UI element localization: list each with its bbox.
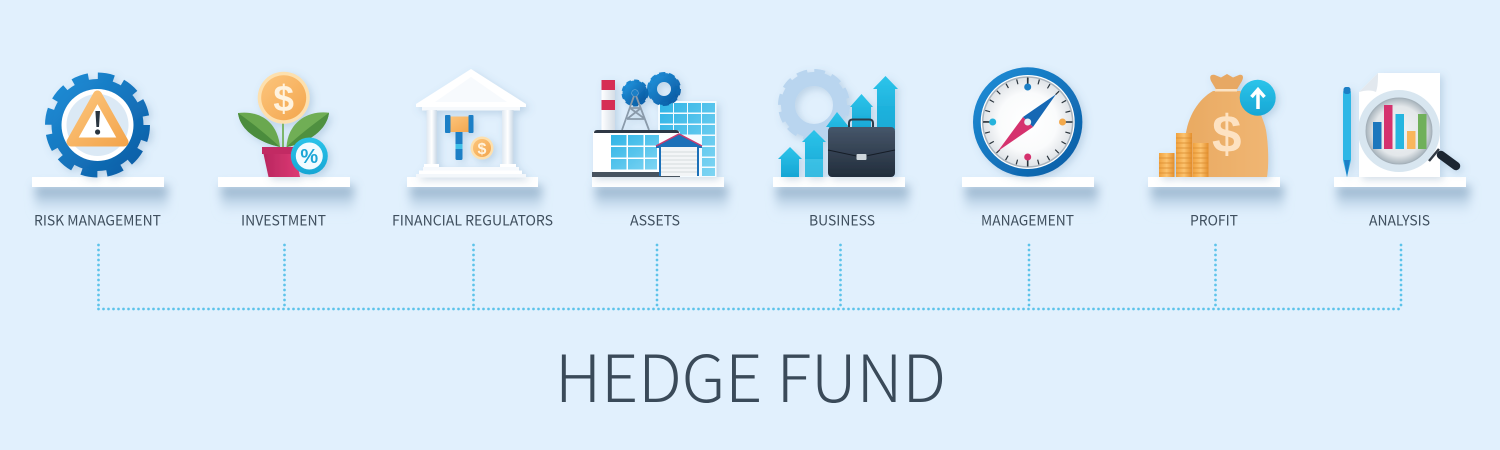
icon: factory, gears and buildings	[592, 74, 716, 177]
item: assets	[592, 74, 728, 231]
item: risk management	[32, 76, 168, 231]
item: profit	[1148, 74, 1284, 231]
shelf	[218, 177, 354, 216]
dotted connector lines	[98, 245, 1401, 309]
shelf	[592, 177, 728, 216]
item: analysis	[1334, 73, 1470, 231]
item: financial regulators	[392, 69, 553, 231]
icon: pen, document and magnifier	[1343, 73, 1456, 177]
item: investment	[218, 72, 354, 231]
shelf	[32, 177, 168, 216]
label: MANAGEMENT	[981, 210, 1074, 231]
label: FINANCIAL REGULATORS	[392, 210, 553, 231]
label: BUSINESS	[809, 210, 875, 231]
item: management	[962, 67, 1098, 231]
label: ASSETS	[630, 210, 680, 231]
icon: gear, growth arrows and briefcase	[778, 72, 898, 177]
icon: money bag, coins and up arrow: $	[1212, 105, 1241, 164]
label: PROFIT	[1190, 210, 1238, 231]
label: INVESTMENT	[241, 210, 326, 231]
shelf	[773, 177, 909, 216]
shelf	[962, 177, 1098, 216]
icon: coin plant in a pot	[238, 72, 329, 177]
item: business	[773, 72, 909, 231]
shelf	[407, 177, 542, 216]
icon: compass	[973, 67, 1082, 177]
label: RISK MANAGEMENT	[34, 210, 161, 231]
icon: bank with gavel and coin: $	[478, 141, 487, 158]
icon: coin plant in a pot: $	[273, 78, 294, 119]
icon: coin plant in a pot: %	[300, 146, 318, 168]
icon: money bag, coins and up arrow	[1159, 74, 1276, 177]
shelf	[1148, 177, 1284, 216]
label: ANALYSIS	[1369, 210, 1430, 231]
title: HEDGE FUND	[555, 327, 946, 421]
shelf	[1334, 177, 1470, 216]
icon: bank with gavel and coin	[416, 69, 526, 178]
icon: gear with warning triangle	[49, 76, 146, 174]
